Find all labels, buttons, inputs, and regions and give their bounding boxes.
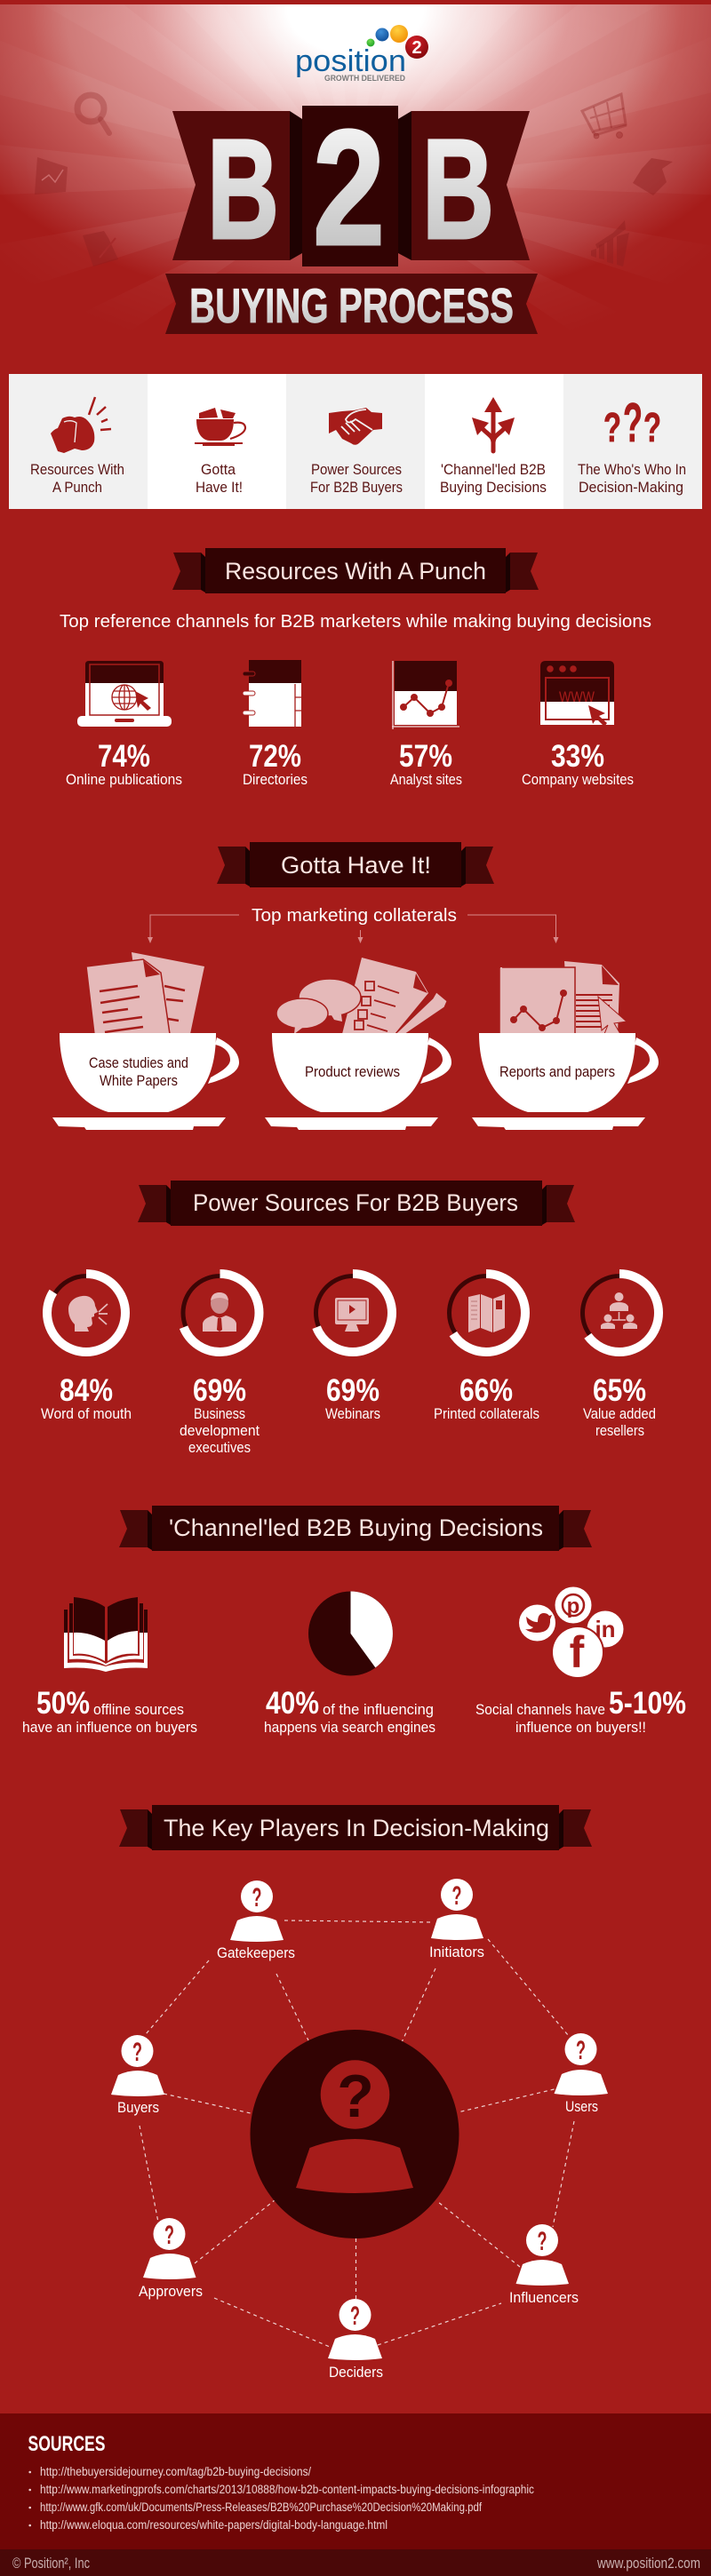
stat: analyst sites: Analyst sites: [390, 771, 462, 788]
stat: word of mouth: [41, 1274, 132, 1422]
heading banner: Power Sources For B2B Buyers: [193, 1189, 518, 1216]
sources panel: [0, 2413, 711, 2549]
nav item: resources with a punch: [9, 374, 148, 509]
icon: question marks: [603, 393, 661, 454]
heading banner: The Key Players In Decision-Making: [164, 1815, 549, 1841]
stat: company websites: 33%: [551, 739, 604, 774]
icon: three way arrows: [472, 397, 515, 451]
logo: position2: 2: [411, 38, 422, 58]
section: power sources: [41, 1181, 659, 1456]
source links: http://www.gfk.com/uk/Documents/Press-Releases/B2B%20Purchase%20Decision%20Making.pdf: [40, 2500, 482, 2514]
stat: webinars: 69%: [326, 1373, 379, 1408]
icon: question marks: ?: [643, 404, 661, 450]
nav item: power sources: Power Sources: [311, 461, 402, 478]
collateral: reports and papers: Reports and papers: [499, 1064, 615, 1080]
icon: magnifier: [77, 95, 109, 133]
left panel: [172, 111, 290, 260]
person: buyers: ?: [132, 2038, 142, 2067]
person: users: Users: [565, 2098, 598, 2115]
icon: folded brochure: [468, 1294, 505, 1332]
icon: question marks: ?: [623, 393, 643, 454]
person: deciders: [328, 2299, 383, 2381]
icon: browser window: [540, 661, 614, 727]
progress ring 69 percent: [181, 1274, 260, 1352]
heading banner: 'Channel'led B2B Buying Decisions: [169, 1515, 543, 1541]
stat: business development executives: [180, 1274, 260, 1456]
stat: offline sources: [22, 1597, 197, 1736]
pie chart 40 percent: [308, 1592, 393, 1675]
nav item: channel led: [425, 374, 563, 509]
collateral: case studies and white papers: Case studies and: [89, 1055, 188, 1071]
stat: business development executives: 69%: [193, 1373, 246, 1408]
icon: line chart: [392, 661, 459, 729]
icon: social media bubbles: f: [570, 1627, 585, 1677]
stat: offline sources: 50%: [36, 1686, 90, 1721]
stat: webinars: Webinars: [325, 1405, 380, 1422]
stat: webinars: [314, 1274, 392, 1422]
stat: directories: 72%: [249, 739, 301, 774]
collateral: product reviews: [265, 958, 451, 1130]
connector arrows: [148, 915, 558, 943]
stat: value added resellers: Value added: [583, 1405, 656, 1422]
progress ring 84 percent: [47, 1274, 125, 1352]
person: gatekeepers: Gatekeepers: [217, 1944, 295, 1961]
icon: open book: [64, 1597, 148, 1672]
source links: [28, 2465, 534, 2532]
stat: social channels: influence on buyers!!: [515, 1719, 646, 1736]
right panel: [411, 111, 530, 260]
icon: speaking head: [68, 1296, 108, 1332]
icon: social media bubbles: in: [595, 1616, 616, 1642]
icon: pointing hand: [633, 158, 673, 195]
nav item: channel led: 'Channel'led B2B: [441, 461, 546, 478]
section: resources with a punch: [60, 548, 651, 788]
stat: word of mouth: Word of mouth: [41, 1405, 132, 1422]
logo: position2: [295, 25, 428, 83]
section: key players: [111, 1805, 608, 2381]
person: initiators: ?: [451, 1881, 462, 1911]
icon: boxing glove: [51, 397, 111, 453]
icon: ringed directory: [243, 660, 301, 727]
person: users: ?: [576, 2036, 586, 2065]
person: influencers: Influencers: [509, 2289, 579, 2306]
coffee cup: [472, 1033, 659, 1130]
person: initiators: [429, 1879, 484, 1960]
person: approvers: Approvers: [139, 2283, 203, 2300]
letter B left: B: [207, 109, 279, 268]
numeral 2: 2: [313, 97, 385, 280]
icon: question marks: ?: [603, 404, 621, 450]
stat: analyst sites: 57%: [399, 739, 452, 774]
stat: social channels: Social channels have: [475, 1701, 605, 1718]
stat: search engines: happens via search engines: [264, 1719, 435, 1736]
collateral: reports and papers: [472, 961, 659, 1130]
icon: shopping cart: [582, 94, 627, 139]
dashed connectors: [140, 1920, 574, 2347]
stat: online publications: 74%: [98, 739, 150, 774]
section: channel led decisions: [22, 1506, 686, 1736]
left fold: [290, 111, 302, 260]
header panel: [0, 0, 711, 539]
person: approvers: ?: [164, 2221, 174, 2250]
stat: company websites: [522, 661, 634, 788]
person: deciders: ?: [350, 2302, 360, 2331]
icon: social media bubbles: p: [567, 1594, 579, 1618]
navigation strip: [9, 374, 702, 509]
heading banner: [172, 548, 539, 593]
stat: printed collaterals: 66%: [459, 1373, 513, 1408]
source links: http://www.eloqua.com/resources/white-papers/digital-body-language.html: [40, 2518, 387, 2532]
icon: browser window: WWW: [559, 688, 595, 705]
central figure: ?: [337, 2063, 374, 2130]
stat: online publications: Online publications: [66, 771, 182, 788]
person: approvers: [139, 2218, 203, 2300]
icon: chart board: [35, 157, 68, 195]
coffee cup: [265, 1033, 451, 1130]
nav item: power sources: For B2B Buyers: [310, 479, 403, 496]
stat: printed collaterals: Printed collaterals: [434, 1405, 539, 1422]
top strip: [0, 0, 711, 4]
heading banner: [217, 842, 494, 887]
stat: value added resellers: [580, 1274, 659, 1439]
logo: position2: position: [295, 44, 406, 78]
icon: coffee cup: [195, 408, 245, 446]
heading banner: [138, 1181, 575, 1226]
heading banner: Gotta Have It!: [281, 852, 431, 879]
source links: http://thebuyersidejourney.com/tag/b2b-buying-decisions/: [40, 2465, 311, 2478]
subheading: Top reference channels for B2B marketers while making buying decisions: [60, 611, 651, 632]
stat: offline sources: have an influence on buyers: [22, 1719, 197, 1736]
icon: growth chart: [591, 220, 629, 266]
icon: handshake: [329, 408, 382, 445]
nav item: gotta have it: Gotta: [201, 461, 236, 478]
icon: video monitor: [335, 1298, 369, 1332]
footer bar: [0, 2549, 711, 2576]
section: gotta have it: [52, 842, 659, 1130]
icon: reseller hierarchy: [601, 1292, 637, 1329]
right fold: [398, 111, 411, 260]
stat: value added resellers: resellers: [595, 1422, 644, 1439]
sources heading: SOURCES: [28, 2432, 105, 2456]
stat: value added resellers: 65%: [593, 1373, 646, 1408]
nav item: resources with a punch: Resources With: [30, 461, 124, 478]
subheading: Top marketing collaterals: [252, 905, 457, 926]
stat: business development executives: executives: [188, 1439, 251, 1456]
nav item: resources with a punch: A Punch: [52, 479, 102, 496]
source links: http://www.marketingprofs.com/charts/2013/10888/how-b2b-content-impacts-buying-decisions-infographic: [40, 2483, 534, 2496]
stat: search engines: 40%: [266, 1686, 319, 1721]
nav item: who's who: The Who's Who In: [578, 461, 686, 478]
stat: directories: Directories: [243, 771, 308, 788]
title banner: B2B: [172, 97, 530, 280]
coffee cup: [52, 1033, 239, 1130]
person: buyers: Buyers: [117, 2099, 159, 2116]
stat: search engines: [264, 1592, 435, 1736]
stat: company websites: Company websites: [522, 771, 634, 788]
person: buyers: [111, 2035, 164, 2116]
person: influencers: [509, 2224, 579, 2306]
stat: social channels: [475, 1586, 686, 1736]
progress ring 65 percent: [580, 1274, 659, 1352]
progress ring 66 percent: [447, 1274, 525, 1352]
stat: business development executives: Business: [194, 1405, 245, 1422]
person: users: [555, 2033, 608, 2115]
icon: report with chart and cursor: [499, 961, 627, 1034]
collateral: case studies and white papers: [52, 952, 239, 1130]
footer bar: © Position², Inc: [12, 2555, 90, 2572]
subtitle banner: buying process: [165, 274, 538, 334]
person: deciders: Deciders: [329, 2364, 383, 2381]
nav item: who's who: Decision-Making: [579, 479, 683, 496]
person: gatekeepers: ?: [252, 1883, 261, 1912]
nav item: who's who: [563, 374, 702, 509]
logo: position2: GROWTH DELIVERED: [324, 74, 405, 83]
person: initiators: Initiators: [429, 1944, 484, 1960]
heading banner: [119, 1506, 592, 1551]
collateral: case studies and white papers: White Papers: [100, 1073, 178, 1089]
icon: social media bubbles: [519, 1586, 624, 1679]
nav item: gotta have it: Have It!: [196, 479, 243, 496]
stat: word of mouth: 84%: [60, 1373, 113, 1408]
stat: offline sources: offline sources: [93, 1701, 184, 1718]
person: gatekeepers: [217, 1880, 295, 1961]
stat: directories: [243, 660, 308, 788]
nav item: power sources: [286, 374, 425, 509]
stat: business development executives: development: [180, 1422, 260, 1439]
heading banner: Resources With A Punch: [225, 558, 486, 584]
center panel: [302, 106, 398, 266]
icon: documents: [86, 952, 204, 1034]
nav item: gotta have it: [148, 374, 286, 509]
icon: businessman: [203, 1292, 236, 1332]
icon: paper and pen: [83, 231, 118, 266]
person: influencers: ?: [537, 2227, 547, 2256]
icon: laptop: [77, 661, 172, 727]
nav item: channel led: Buying Decisions: [440, 479, 547, 496]
subtitle banner: buying process: BUYING PROCESS: [189, 278, 514, 333]
icon: speech bubbles, checklist and pencil: [276, 958, 447, 1034]
stat: social channels: 5-10%: [609, 1686, 686, 1721]
stat: printed collaterals: [434, 1274, 539, 1422]
letter B right: B: [422, 109, 494, 268]
stat: search engines: of the influencing: [323, 1701, 434, 1718]
progress ring 69 percent: [314, 1274, 392, 1352]
central figure: [251, 2030, 459, 2238]
stat: analyst sites: [390, 661, 462, 788]
hero glow: [0, 4, 711, 355]
collateral: product reviews: Product reviews: [305, 1064, 400, 1080]
heading banner: [119, 1805, 592, 1850]
stat: online publications: [66, 661, 182, 788]
sunburst rays: [0, 0, 711, 539]
